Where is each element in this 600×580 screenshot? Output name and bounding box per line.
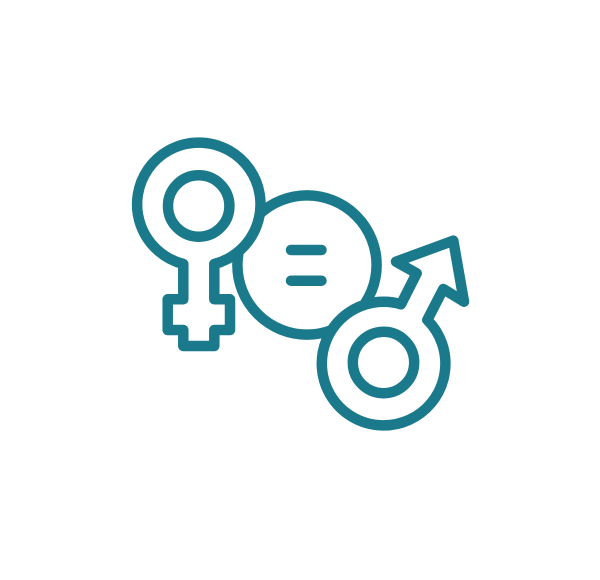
icon: male symbol [322,241,464,425]
icon: equals circle [237,195,377,335]
icon: female symbol [137,143,260,346]
